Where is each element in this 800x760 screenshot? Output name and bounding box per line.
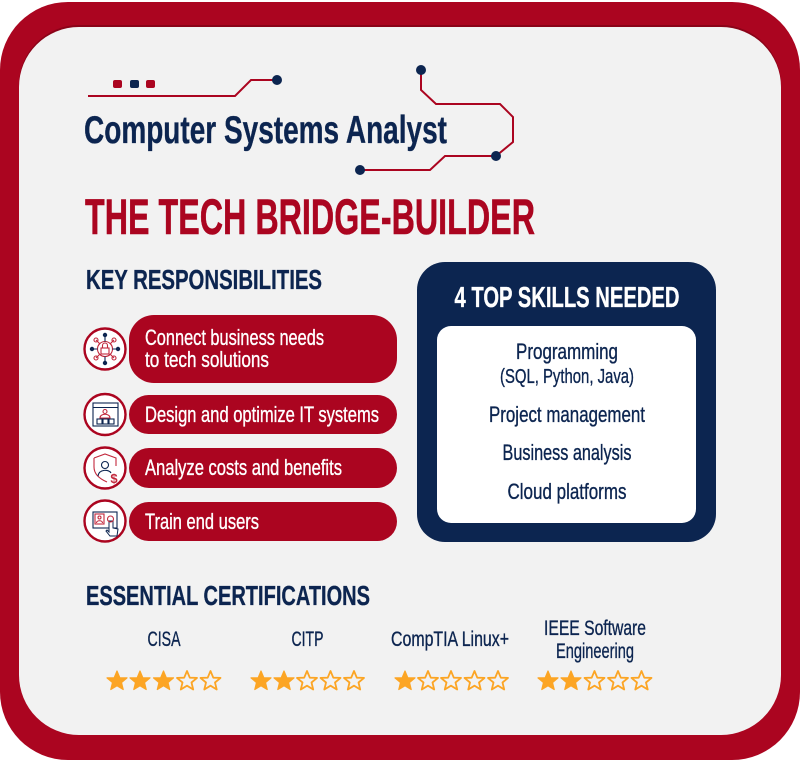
inner panel top shadow (19, 25, 781, 225)
certification: CompTIA Linux+ (391, 628, 509, 690)
certification: CITP: CITP (292, 628, 324, 651)
certification: CISA (107, 628, 220, 690)
skills card: Cloud platforms (508, 479, 626, 504)
responsibility 2 (129, 395, 397, 434)
responsibility 3: Analyze costs and benefits (145, 455, 342, 480)
skills card: Programming (516, 339, 618, 364)
icon: network lock (84, 328, 126, 370)
responsibility 1: to tech solutions (145, 347, 269, 372)
certification: CITP (251, 628, 364, 690)
skills card: (SQL, Python, Java) (500, 366, 634, 388)
responsibility 2: Design and optimize IT systems (145, 402, 379, 427)
responsibility 4: Train end users (145, 509, 259, 534)
responsibility 1: Connect business needs (145, 325, 324, 350)
icon: shield user (84, 448, 126, 488)
circuit decoration: left (88, 75, 282, 96)
responsibility 4 (129, 502, 397, 541)
icon: shield user: $ (110, 471, 118, 486)
certification: CISA: CISA (148, 628, 180, 651)
responsibility 3 (129, 448, 397, 488)
heading: top skills: 4 TOP SKILLS NEEDED (454, 282, 680, 314)
certification: IEEE Software Engineering: IEEE Software (544, 617, 646, 640)
certification: CompTIA Linux+: CompTIA Linux+ (391, 628, 509, 651)
certification: IEEE Software Engineering (538, 617, 652, 690)
skills card: Project management (489, 402, 645, 427)
icon: touch screen (84, 500, 126, 542)
heading: essential certifications: ESSENTIAL CERTIFICATIONS (86, 580, 370, 611)
circuit decoration: right (355, 65, 513, 175)
panel: top skills (417, 262, 716, 542)
subtitle: THE TECH BRIDGE-BUILDER (85, 189, 535, 245)
title: Computer Systems Analyst (84, 109, 447, 152)
skills card (437, 326, 696, 523)
heading: key responsibilities: KEY RESPONSIBILITIES (86, 264, 322, 295)
icon: system window (84, 394, 126, 435)
responsibility 1 (129, 315, 397, 383)
certification: IEEE Software Engineering: Engineering (556, 640, 634, 663)
skills card: Business analysis (502, 440, 632, 465)
